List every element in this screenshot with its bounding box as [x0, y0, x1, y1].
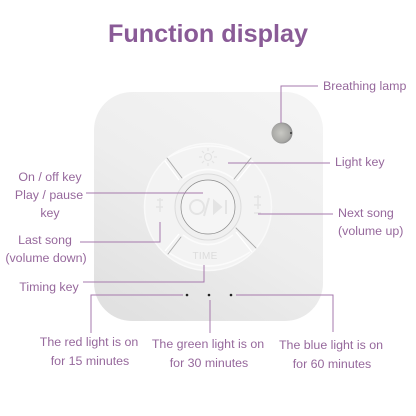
control dial — [144, 144, 272, 270]
icon: light — [199, 148, 217, 166]
label: on/off and play/pause — [15, 170, 83, 220]
label: red light: The red light is on — [40, 335, 138, 349]
label: next song — [338, 206, 403, 238]
icon: volume marks — [156, 195, 261, 213]
label: red light — [40, 335, 138, 368]
label: blue light: The blue light is on — [279, 338, 383, 352]
label: on/off and play/pause: Play / pause — [15, 188, 83, 202]
device body — [94, 92, 323, 321]
label: blue light — [279, 338, 383, 371]
center ring — [175, 174, 241, 240]
label: last song — [5, 233, 87, 265]
label: green light: for 30 minutes — [170, 356, 248, 370]
leader lines — [80, 86, 333, 333]
label: on/off and play/pause: key — [40, 206, 60, 220]
label: breathing lamp: Breathing lamp — [323, 79, 406, 93]
play icons — [190, 198, 226, 216]
label: red light: for 15 minutes — [51, 354, 129, 368]
label: next song: Next song — [338, 206, 394, 220]
label: last song: Last song — [18, 233, 72, 247]
label: time: TIME — [192, 251, 218, 262]
indicator lights — [186, 294, 232, 296]
key outlines — [167, 146, 251, 266]
label: green light — [152, 337, 264, 370]
title: Function display — [108, 20, 308, 48]
label: blue light: for 60 minutes — [293, 357, 371, 371]
label: timing key: Timing key — [19, 280, 80, 294]
label: next song: (volume up) — [338, 224, 403, 238]
label: last song: (volume down) — [5, 251, 87, 265]
icon: breathing lamp — [272, 122, 292, 144]
label: green light: The green light is on — [152, 337, 264, 351]
label: light key: Light key — [335, 155, 385, 169]
label: on/off and play/pause: On / off key — [18, 170, 82, 184]
